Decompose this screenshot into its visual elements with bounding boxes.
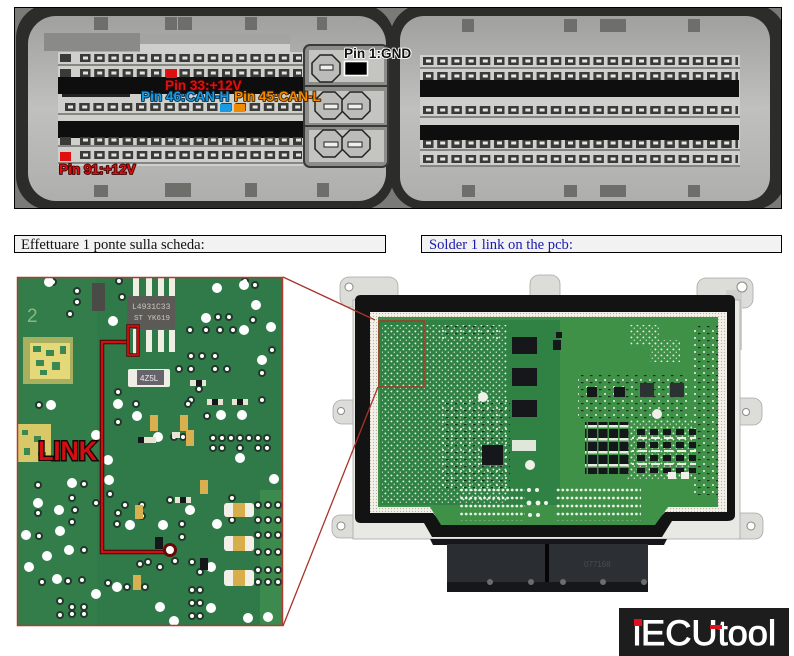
- label: pin 91: Pin 91:+12V: [59, 162, 136, 177]
- pin marker: pin 91: [60, 152, 71, 161]
- large pads: [21, 277, 279, 626]
- data matrix codes: [17, 337, 73, 462]
- small capacitors: [133, 380, 254, 590]
- chip L4931C33: L4931C33: [132, 303, 171, 312]
- logo: iECUtool: iECUtool: [633, 614, 776, 653]
- label: pin 1 GND: Pin 1:GND: [344, 46, 411, 61]
- label: LINK: LINK: [38, 436, 97, 466]
- panel: ECU board photo: [332, 275, 763, 592]
- heading: Italian instruction: [14, 236, 386, 253]
- pin marker: pin 46: [220, 104, 231, 112]
- label: pin 46 CAN-H: Pin 46:CAN-H: [141, 89, 229, 104]
- pin marker: pin 33: [166, 69, 177, 78]
- connector body: 077168: [584, 560, 611, 569]
- left connector housing: [16, 4, 394, 210]
- panel: PCB close-up with link: [17, 277, 290, 630]
- green board: [378, 317, 718, 525]
- pin marker: pin 1: [344, 62, 368, 76]
- chip L4931C33: ST YK619: [134, 315, 170, 323]
- small component: 4Z5L: [140, 374, 159, 383]
- black gasket: [355, 295, 735, 537]
- label: pin 45 CAN-L: Pin 45:CAN-L: [234, 89, 321, 104]
- heading: English instruction: [422, 236, 782, 253]
- heading: English instruction: Solder 1 link on the pcb:: [429, 237, 573, 253]
- panel: connector photo with pin labels: [14, 4, 786, 210]
- pin marker: pin 45: [234, 104, 245, 112]
- highlight rectangle: [379, 321, 424, 387]
- vias: [35, 278, 281, 619]
- perforated strip: [370, 312, 727, 525]
- logo: iECUtool: [619, 608, 789, 656]
- silkscreen number: 2: [27, 306, 38, 327]
- link wire: [102, 326, 176, 556]
- large ICs: [482, 332, 684, 465]
- pad rows: [459, 488, 641, 521]
- label: pin 33: Pin 33:+12V: [165, 78, 242, 93]
- connector flange: [430, 539, 667, 545]
- right connector housing: [390, 4, 786, 210]
- heading: Italian instruction: Effettuare 1 ponte sulla scheda:: [21, 237, 205, 253]
- callout lines from board to close-up: [283, 277, 378, 626]
- diode: [92, 283, 105, 311]
- power transistor grid: [585, 422, 629, 474]
- connector body: [447, 544, 648, 592]
- metal housing: [332, 275, 763, 539]
- component speckle: [382, 325, 718, 503]
- chip L4931C33: [127, 278, 175, 356]
- small component: [128, 369, 170, 387]
- mounting pads: [478, 392, 689, 479]
